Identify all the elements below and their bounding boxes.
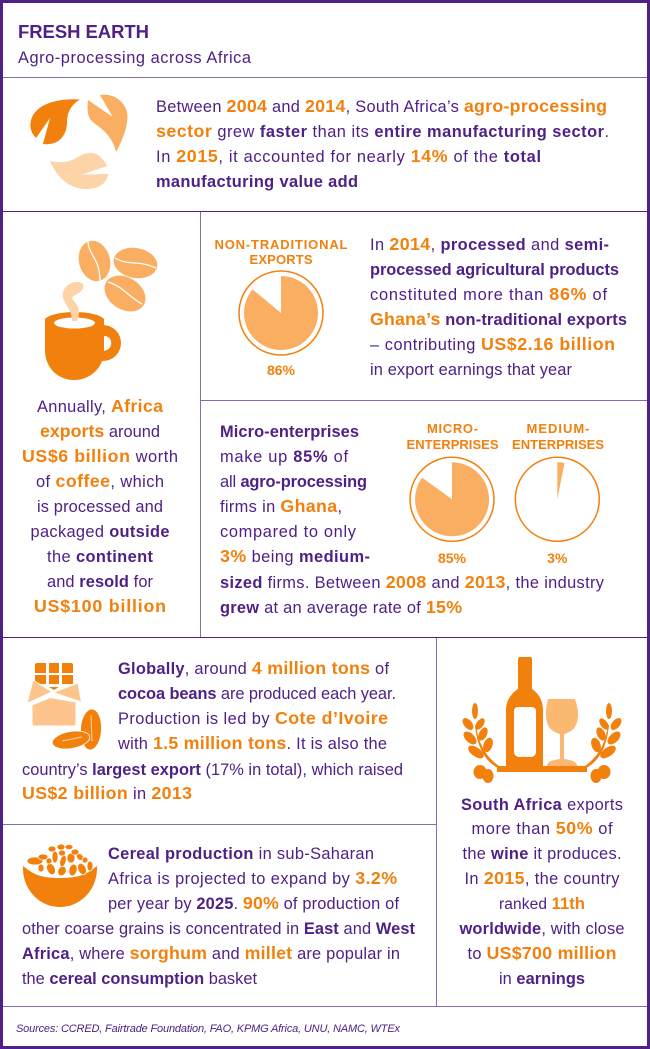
text block: coffee: of coffee, which bbox=[36, 471, 164, 491]
text block: wine: in earnings bbox=[499, 970, 585, 988]
text block: wine: In 2015, the country bbox=[464, 868, 620, 888]
text block: coffee: packaged outside bbox=[30, 523, 170, 541]
chart: non-traditional exports pie: EXPORTS bbox=[250, 252, 313, 267]
chart: non-traditional exports pie bbox=[214, 237, 348, 378]
text block: cereal: Cereal production in sub-Saharan bbox=[108, 845, 374, 863]
icon: coffee cup and beans bbox=[45, 237, 160, 380]
text block: Ghana exports: – contributing US$2.16 billion bbox=[370, 334, 615, 354]
icon: chocolate and cocoa beans bbox=[27, 663, 103, 752]
text block: coffee: and resold for bbox=[47, 573, 154, 591]
text block: micro-enterprises: firms in Ghana, bbox=[220, 496, 342, 516]
text block: South Africa agro-processing: In 2015, it accounted for nearly 14% of the total bbox=[156, 146, 541, 166]
text block: coffee: US$100 billion bbox=[34, 596, 166, 616]
text block: Ghana exports: Ghana’s non-traditional exports bbox=[370, 309, 627, 329]
text block: Ghana exports: In 2014, processed and semi- bbox=[370, 234, 609, 254]
icon: three leaves bbox=[30, 95, 127, 189]
chart: medium-enterprises pie bbox=[512, 421, 604, 566]
text block: coffee: US$6 billion worth bbox=[22, 446, 178, 466]
text block: cocoa: with 1.5 million tons. It is also the bbox=[117, 733, 387, 753]
text block: cereal bbox=[22, 845, 416, 988]
text block: coffee: exports around bbox=[40, 421, 160, 441]
text block: micro-enterprises: all agro-processing bbox=[220, 473, 367, 491]
text block: wine: to US$700 million bbox=[468, 943, 616, 963]
text block: micro-enterprises: Micro-enterprises bbox=[220, 423, 359, 441]
text block: cocoa bbox=[22, 658, 403, 803]
text block: South Africa agro-processing: Between 2004 and 2014, South Africa’s agro-processing bbox=[156, 96, 607, 116]
chart: non-traditional exports pie: NON-TRADITIONAL bbox=[214, 237, 348, 252]
text block: cereal: per year by 2025. 90% of production of bbox=[108, 893, 399, 913]
text block: cocoa: Globally, around 4 million tons of bbox=[118, 658, 389, 678]
chart: medium-enterprises pie: MEDIUM- bbox=[526, 421, 590, 436]
text block: Ghana exports: in export earnings that year bbox=[370, 361, 573, 379]
text block: micro-enterprises: grew at an average rate of 15% bbox=[220, 597, 462, 617]
text block: coffee: Annually, Africa bbox=[37, 396, 163, 416]
icon: bowl of grains bbox=[23, 844, 97, 907]
text block: cocoa: Production is led by Cote d’Ivoire bbox=[118, 708, 388, 728]
title bbox=[18, 21, 252, 67]
text block: wine: more than 50% of bbox=[472, 818, 613, 838]
text block: cereal: Africa, where sorghum and millet are popular in bbox=[22, 943, 400, 963]
text block: micro-enterprises: sized firms. Between 2008 and 2013, the industry bbox=[220, 572, 605, 592]
text block: cereal: the cereal consumption basket bbox=[22, 970, 257, 988]
text block: coffee: is processed and bbox=[37, 498, 163, 516]
title: FRESH EARTH bbox=[18, 21, 149, 42]
text block: wine bbox=[458, 796, 624, 988]
chart: micro-enterprises pie bbox=[406, 421, 499, 566]
text block: cereal: Africa is projected to expand by 3.2% bbox=[108, 868, 397, 888]
text block: Ghana exports: constituted more than 86% of bbox=[370, 284, 607, 304]
text block: South Africa agro-processing bbox=[156, 96, 609, 191]
icon: wine bottle, glass and laurels bbox=[460, 657, 624, 783]
text block: South Africa agro-processing: manufacturing value add bbox=[156, 173, 358, 191]
text block: micro-enterprises: compared to only bbox=[220, 523, 357, 541]
text block: wine: ranked 11th bbox=[499, 895, 585, 913]
text block: cocoa: country’s largest export (17% in total), which raised bbox=[22, 761, 403, 779]
text block: coffee: the continent bbox=[47, 548, 154, 566]
text block: coffee bbox=[22, 396, 178, 616]
text block: micro-enterprises: make up 85% of bbox=[220, 448, 348, 466]
chart: medium-enterprises pie: 3% bbox=[547, 550, 568, 566]
chart: medium-enterprises pie: ENTERPRISES bbox=[512, 437, 604, 452]
text block: wine: the wine it produces. bbox=[462, 845, 622, 863]
text block: South Africa agro-processing: sector grew faster than its entire manufacturing sector. bbox=[156, 121, 609, 141]
title: Agro-processing across Africa bbox=[18, 49, 252, 67]
chart: micro-enterprises pie: 85% bbox=[438, 550, 467, 566]
text block: cocoa: US$2 billion in 2013 bbox=[22, 783, 192, 803]
chart: micro-enterprises pie: MICRO- bbox=[427, 421, 478, 436]
text block: cereal: other coarse grains is concentrated in East and West bbox=[22, 920, 416, 938]
text block: micro-enterprises bbox=[220, 423, 605, 617]
text block: micro-enterprises: 3% being medium- bbox=[220, 546, 370, 566]
chart: micro-enterprises pie: ENTERPRISES bbox=[406, 437, 499, 452]
text block: cocoa: cocoa beans are produced each year. bbox=[118, 685, 396, 703]
chart: non-traditional exports pie: 86% bbox=[267, 362, 296, 378]
text block: wine: worldwide, with close bbox=[458, 920, 624, 938]
text block: Ghana exports: processed agricultural products bbox=[370, 261, 619, 279]
sources: Sources: CCRED, Fairtrade Foundation, FAO, KPMG Africa, UNU, NAMC, WTEx bbox=[16, 1023, 400, 1035]
text block: Ghana exports bbox=[370, 234, 627, 379]
text block: wine: South Africa exports bbox=[461, 796, 623, 814]
